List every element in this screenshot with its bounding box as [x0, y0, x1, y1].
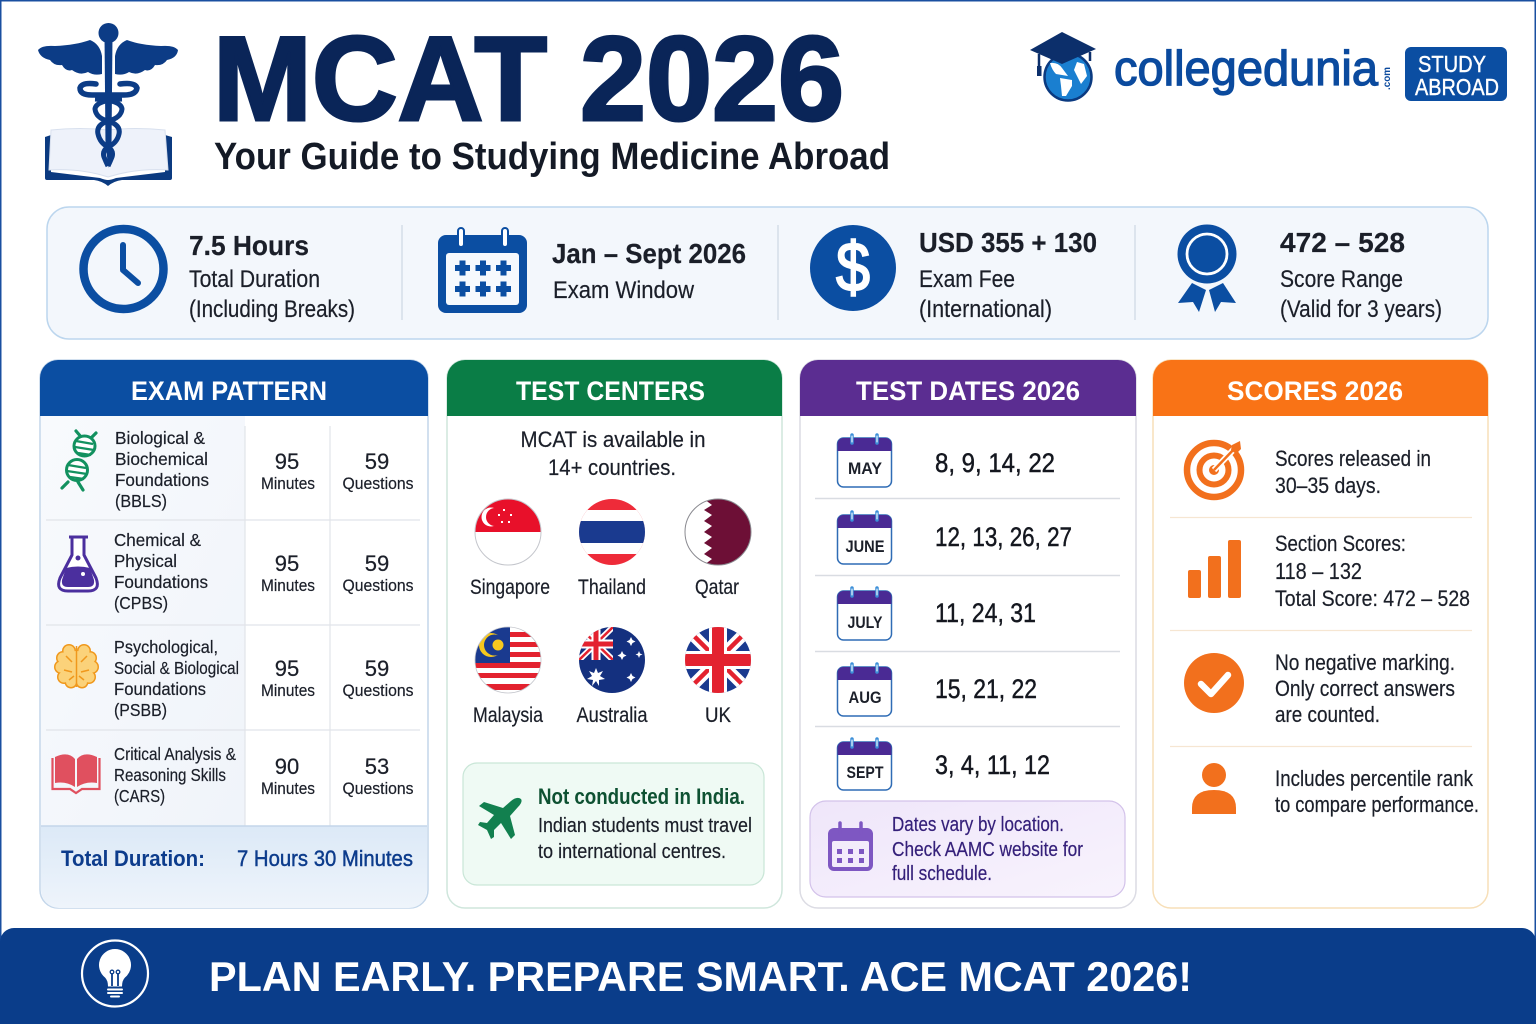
fact: duration	[189, 230, 355, 323]
row: CARS: 53	[365, 754, 389, 779]
row: CARS: Reasoning Skills	[114, 765, 226, 785]
flag: Thailand	[579, 499, 645, 565]
icon: bars	[1188, 540, 1241, 598]
icon: brain	[54, 644, 99, 688]
callout: not conducted in India	[463, 763, 764, 885]
heading	[40, 360, 428, 416]
row: May: 8, 9, 14, 22	[935, 448, 1055, 478]
icon: DNA	[62, 431, 96, 490]
row: CPBS: 95	[275, 551, 299, 576]
icon: red book	[52, 754, 100, 793]
row: June: 12, 13, 26, 27	[935, 522, 1072, 552]
callout: dates vary	[810, 801, 1125, 897]
row: CARS: 90	[275, 754, 299, 779]
row: CPBS: 59	[365, 551, 389, 576]
icon: plane	[478, 798, 522, 839]
heading: EXAM PATTERN	[131, 376, 327, 406]
row: PSBB: Foundations	[114, 679, 206, 699]
panel: scores	[1153, 360, 1488, 908]
row: PSBB: Social & Biological	[114, 658, 239, 678]
fact: exam fee: USD 355 + 130	[919, 227, 1097, 258]
callout: dates vary: Dates vary by location.	[892, 814, 1064, 836]
row: June: JUNE	[846, 537, 884, 556]
row: release time: 30–35 days.	[1275, 473, 1381, 498]
flag: UK	[685, 627, 751, 693]
panel: test dates	[800, 360, 1136, 908]
row: July	[838, 588, 1036, 640]
row: June	[838, 512, 1072, 564]
row: September	[838, 739, 1050, 790]
callout: dates vary: Check AAMC website for	[892, 839, 1083, 861]
badge: study abroad: ABROAD	[1415, 74, 1499, 100]
row: BBLS: 59	[365, 449, 389, 474]
row: CARS: Questions	[342, 780, 414, 798]
call to action: PLAN EARLY. PREPARE SMART. ACE MCAT 2026!	[209, 953, 1192, 1000]
row: PSBB: (PSBB)	[114, 700, 167, 720]
label: row two countries: Australia	[576, 704, 648, 727]
fact: exam window	[552, 238, 746, 304]
row: BBLS: Questions	[342, 475, 414, 493]
badge: study abroad: STUDY	[1418, 51, 1486, 77]
row: percentile rank	[1192, 763, 1479, 817]
row: September: SEPT	[846, 763, 884, 782]
icon: purple calendar	[828, 823, 873, 871]
row: section scores: 118 – 132	[1275, 558, 1362, 584]
label: row two countries: UK	[705, 704, 731, 727]
fact: score range: (Valid for 3 years)	[1280, 296, 1442, 323]
row: section scores: Total Score: 472 – 528	[1275, 586, 1470, 611]
icon: calendar	[438, 231, 527, 313]
intro text	[520, 427, 706, 480]
fact: duration: 7.5 Hours	[189, 230, 309, 261]
row: PSBB: 59	[365, 656, 389, 681]
panel: key facts strip	[47, 207, 1488, 339]
badge: study abroad	[1405, 47, 1507, 101]
logo: collegedunia study abroad	[1030, 32, 1507, 101]
icon: dollar	[810, 225, 896, 311]
flag: Australia	[579, 627, 645, 693]
fact: score range	[1280, 227, 1442, 323]
row: BBLS: Biological &	[115, 428, 205, 448]
fact: exam fee: Exam Fee	[919, 266, 1015, 293]
fact: exam window: Jan – Sept 2026	[552, 238, 746, 269]
row: percentile rank: Includes percentile rank	[1275, 766, 1474, 791]
heading: TEST DATES 2026	[856, 376, 1080, 406]
flag: Malaysia	[475, 627, 541, 693]
label: row one countries: Qatar	[695, 576, 739, 599]
row: May	[838, 435, 1055, 487]
heading	[447, 360, 782, 416]
icon: flask	[59, 537, 97, 591]
row: release time: Scores released in	[1275, 446, 1431, 471]
intro text: 14+ countries.	[548, 455, 676, 480]
wordmark suffix: .com	[1382, 67, 1393, 90]
total duration: 7 Hours 30 Minutes	[237, 846, 413, 871]
fact: duration: (Including Breaks)	[189, 296, 355, 323]
row: BBLS: Foundations	[115, 470, 209, 490]
icon: caduceus over open book	[38, 23, 178, 186]
row: CPBS: Foundations	[114, 572, 208, 592]
row: May: MAY	[848, 459, 883, 478]
fact: exam window: Exam Window	[553, 277, 695, 304]
callout: not conducted in India: Not conducted in India.	[538, 784, 745, 809]
row: CPBS	[59, 530, 413, 613]
row: CPBS: Minutes	[261, 577, 315, 595]
heading	[1153, 360, 1488, 416]
total duration: Total Duration:	[61, 846, 205, 871]
row: no negative marking	[1184, 650, 1455, 727]
panel: test centers	[447, 360, 782, 908]
row: no negative marking: No negative marking.	[1275, 650, 1455, 675]
callout: dates vary: full schedule.	[892, 863, 992, 885]
label: row one countries: Singapore	[470, 576, 550, 599]
row: CARS: (CARS)	[114, 786, 165, 806]
row: CPBS: Chemical &	[114, 530, 201, 550]
row: CARS: Minutes	[261, 780, 315, 798]
row: section scores: Section Scores:	[1275, 531, 1406, 556]
row: PSBB: 95	[275, 656, 299, 681]
subtitle: Your Guide to Studying Medicine Abroad	[214, 136, 890, 178]
row: CPBS: Physical	[114, 551, 177, 571]
footer banner	[0, 928, 1536, 1024]
fact: exam fee	[919, 227, 1097, 323]
wordmark: collegedunia	[1114, 42, 1379, 96]
row: BBLS: Biochemical	[115, 449, 208, 469]
heading: TEST CENTERS	[516, 376, 705, 406]
row: PSBB: Psychological,	[114, 637, 218, 657]
row: CARS: Critical Analysis &	[114, 744, 236, 764]
row: CPBS: Questions	[342, 577, 414, 595]
row: CPBS: (CPBS)	[114, 593, 168, 613]
row: no negative marking: are counted.	[1275, 702, 1380, 727]
icon: light bulb	[82, 940, 148, 1006]
row: PSBB	[54, 637, 414, 720]
heading: SCORES 2026	[1227, 376, 1403, 406]
row: July: JULY	[848, 613, 883, 632]
flag: Qatar	[685, 499, 751, 565]
row: August: 15, 21, 22	[935, 674, 1037, 704]
row: section scores	[1188, 531, 1470, 611]
row: PSBB: Questions	[342, 682, 414, 700]
icon: graduation cap globe	[1030, 32, 1096, 100]
row: August: AUG	[848, 688, 882, 707]
row: release time	[1187, 441, 1431, 498]
row: BBLS	[62, 428, 414, 511]
label: row two countries	[473, 704, 731, 727]
fact: duration: Total Duration	[189, 266, 320, 293]
title: MCAT 2026	[213, 12, 844, 146]
row: BBLS: Minutes	[261, 475, 315, 493]
flag: Singapore	[475, 499, 541, 565]
row: PSBB: Minutes	[261, 682, 315, 700]
label: row one countries: Thailand	[578, 576, 646, 599]
icon: award ribbon	[1178, 224, 1236, 312]
fact: score range: Score Range	[1280, 266, 1403, 293]
icon: person	[1192, 763, 1236, 814]
heading	[800, 360, 1136, 416]
row: BBLS: 95	[275, 449, 299, 474]
label: row two countries: Malaysia	[473, 704, 543, 727]
row: percentile rank: to compare performance.	[1275, 792, 1479, 817]
row: CARS	[52, 744, 414, 806]
intro text: MCAT is available in	[520, 427, 706, 452]
fact: exam fee: (International)	[919, 296, 1052, 323]
row: August	[838, 664, 1037, 716]
icon: dollar: $	[836, 228, 870, 306]
icon: clock	[84, 229, 164, 309]
total duration	[61, 846, 413, 871]
callout: not conducted in India: Indian students must travel	[538, 815, 752, 837]
panel: exam pattern	[40, 360, 428, 908]
icon: check	[1184, 653, 1244, 713]
row: September: 3, 4, 11, 12	[935, 750, 1050, 780]
callout: not conducted in India: to international centres.	[538, 841, 726, 863]
icon: target	[1187, 441, 1241, 497]
row: no negative marking: Only correct answers	[1275, 676, 1455, 701]
label: row one countries	[470, 576, 739, 599]
fact: score range: 472 – 528	[1280, 227, 1405, 258]
row: BBLS: (BBLS)	[115, 491, 167, 511]
row: July: 11, 24, 31	[935, 598, 1036, 628]
